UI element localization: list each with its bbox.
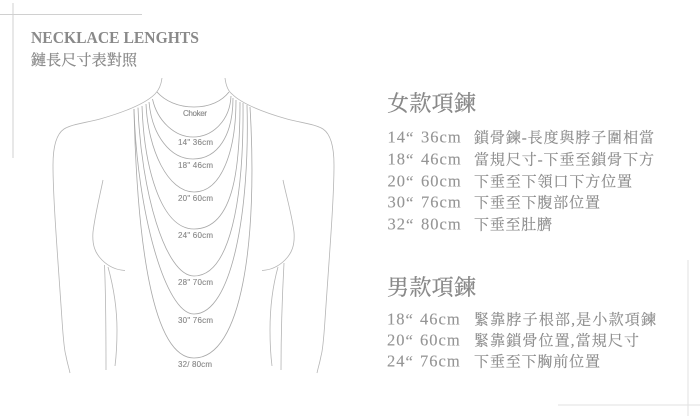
list: women's necklace sizes: 80cm [421, 214, 462, 234]
list: women's necklace sizes: 20 [388, 172, 406, 190]
list: men's necklace sizes: 46cm [420, 310, 461, 328]
heading: women's necklaces: 女款項鍊 [387, 91, 476, 116]
list: women's necklace sizes: 下垂至下腹部位置 [474, 194, 600, 212]
body outline illustration [53, 78, 334, 373]
list: men's necklace sizes: 下垂至下胸前位置 [474, 354, 600, 370]
list: women's necklace sizes: “ [406, 150, 414, 170]
list: men's necklace sizes [387, 310, 656, 372]
necklace length labels: 20" 60cm [178, 194, 213, 203]
list: women's necklace sizes: 當規尺寸-下垂至鎖骨下方 [474, 152, 654, 168]
necklace length labels: 14" 36cm [178, 138, 213, 147]
list: women's necklace sizes: 下垂至肚臍 [474, 216, 552, 234]
list: men's necklace sizes: 76cm [420, 352, 461, 370]
list: men's necklace sizes: 20 [387, 330, 406, 350]
list: women's necklace sizes: “ [406, 128, 414, 148]
list: women's necklace sizes: “ [406, 216, 414, 234]
list: women's necklace sizes: 36cm [421, 128, 462, 146]
list: women's necklace sizes: 46cm [421, 150, 462, 168]
list: men's necklace sizes: 緊靠脖子根部,是小款項鍊 [474, 310, 656, 328]
list: men's necklace sizes: 24 [387, 352, 406, 370]
necklace length labels: 24" 60cm [178, 231, 213, 240]
list: women's necklace sizes: 鎖骨鍊-長度與脖子圍相當 [474, 128, 654, 146]
list: women's necklace sizes: “ [406, 194, 414, 212]
list: women's necklace sizes: “ [406, 172, 414, 192]
list: women's necklace sizes: 76cm [421, 192, 462, 212]
necklace length labels: 18" 46cm [178, 161, 213, 170]
title [31, 28, 199, 69]
list: women's necklace sizes: 18 [388, 150, 406, 168]
list: women's necklace sizes [388, 128, 654, 234]
list: men's necklace sizes: “ [406, 352, 414, 372]
list: women's necklace sizes: 60cm [421, 172, 462, 190]
necklace length labels: Choker [183, 109, 207, 118]
list: men's necklace sizes: 60cm [420, 330, 461, 350]
title: 鏈長尺寸表對照 [31, 51, 138, 69]
list: men's necklace sizes: 緊靠鎖骨位置,當規尺寸 [474, 332, 639, 350]
list: women's necklace sizes: 30 [388, 192, 406, 212]
title: NECKLACE LENGHTS [31, 28, 199, 47]
heading: men's necklaces: 男款項鍊 [387, 275, 476, 300]
necklace length labels: 28" 70cm [178, 278, 213, 287]
list: women's necklace sizes: 14 [388, 128, 406, 146]
list: women's necklace sizes: 下垂至下領口下方位置 [474, 174, 632, 190]
necklace length labels: 30" 76cm [178, 316, 213, 325]
list: women's necklace sizes: 32 [388, 214, 406, 234]
list: men's necklace sizes: “ [406, 332, 414, 350]
list: men's necklace sizes: “ [406, 310, 414, 330]
necklace curves [134, 92, 252, 358]
necklace length labels [178, 109, 213, 369]
list: men's necklace sizes: 18 [387, 310, 406, 328]
necklace length labels: 32/ 80cm [178, 360, 212, 369]
